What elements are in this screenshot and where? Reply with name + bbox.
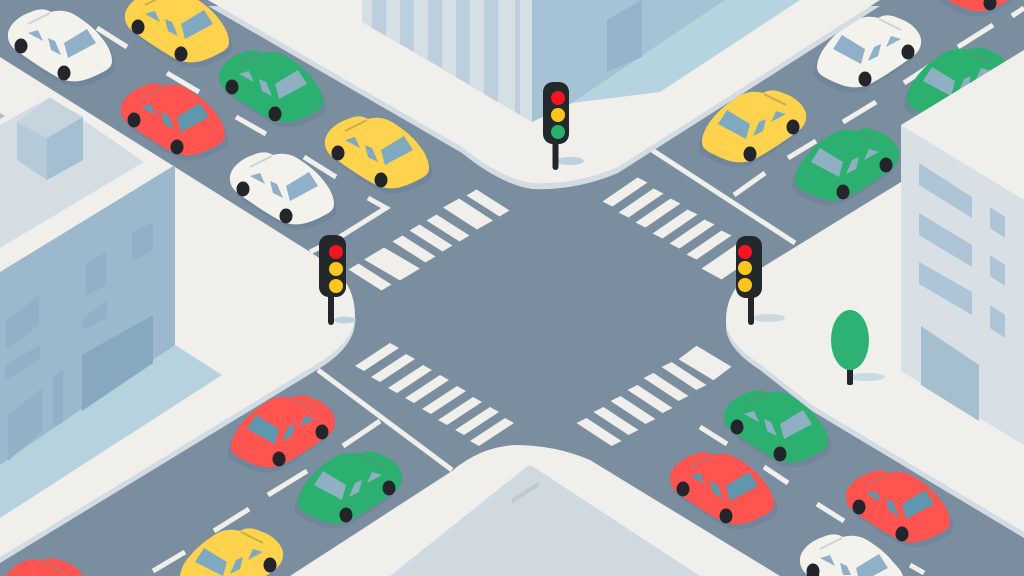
crosswalk: south-west xyxy=(355,343,514,446)
car: yellow, cut off by the frame xyxy=(180,528,283,576)
building: south roof xyxy=(390,466,700,576)
rooftop box xyxy=(17,98,83,180)
sidewalk: east block xyxy=(726,50,1024,538)
crosswalk: north-east xyxy=(602,178,756,280)
traffic light: east corner xyxy=(736,236,785,325)
traffic light: north corner xyxy=(543,82,584,170)
traffic light: west corner xyxy=(319,235,356,325)
sidewalk: south block xyxy=(290,445,780,576)
building: west xyxy=(0,97,222,518)
car: white, cut off by the frame xyxy=(800,534,903,576)
building: north xyxy=(362,0,800,122)
cars: south-east lanes xyxy=(670,390,953,576)
car: red, cut off by the frame xyxy=(4,558,83,576)
crosswalk: north-west xyxy=(348,190,510,290)
sidewalk: west block xyxy=(0,57,355,563)
cars: north-east lanes xyxy=(699,0,1024,205)
crosswalk: south-east xyxy=(576,346,732,446)
sidewalk: north block xyxy=(208,0,880,189)
tree xyxy=(831,310,885,385)
cars: north-west lanes xyxy=(8,0,432,229)
cars: south-west lanes xyxy=(4,395,402,576)
building: east xyxy=(901,125,1024,445)
